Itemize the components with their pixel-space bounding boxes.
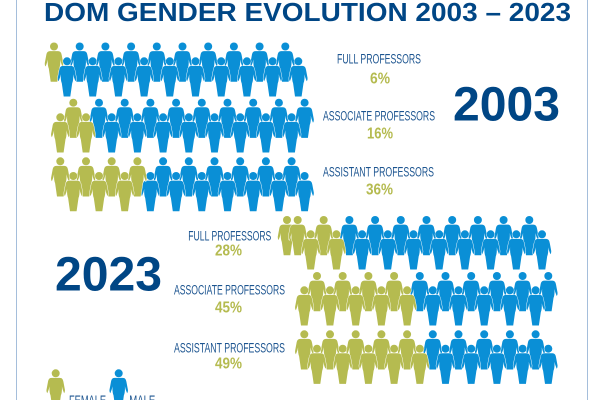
male figures [141,157,314,211]
label: 2023 assistant professors [174,340,285,373]
female figures [295,272,416,326]
pictogram: 2003 associate professors [51,99,314,152]
label: 2003 full professors: 6% [370,71,390,88]
male figures [58,42,308,96]
label: 2023 associate professors [174,282,285,317]
label: 2023 full professors: FULL PROFESSORS [188,229,271,244]
label: 2003 full professors: FULL PROFESSORS [337,52,421,67]
pictogram: 2023 full professors [278,216,551,270]
label: 2023 full professors [188,229,271,260]
year: 2003: 2003 [453,78,560,132]
male figures [340,216,551,270]
male figures [411,272,558,326]
male figures [90,99,314,152]
label: 2003 assistant professors: 36% [366,182,393,199]
label: 2023 associate professors: 45% [215,300,242,317]
legend [46,369,155,400]
label: 2003 assistant professors [323,165,434,199]
label: 2003 associate professors: 16% [367,126,393,143]
label: 2023 assistant professors: 49% [215,356,242,373]
label: 2003 full professors [337,52,421,88]
label: 2023 full professors: 28% [215,243,242,260]
label: 2023 associate professors: ASSOCIATE PROFESSORS [174,282,285,297]
female figures [51,157,147,211]
pictogram: 2023 assistant professors [295,330,558,384]
pictogram: 2003 assistant professors [51,157,314,211]
female figures [45,42,63,82]
label: 2023 assistant professors: ASSISTANT PROFESSORS [174,340,285,355]
icon: male figure [109,369,128,400]
female figures [278,216,346,270]
year: 2023: 2023 [55,248,162,302]
label: 2003 associate professors [323,109,435,143]
pictogram: 2003 full professors [45,42,308,96]
icon: female figure [46,369,65,400]
pictogram: 2023 associate professors [295,272,558,326]
male figures [424,330,558,384]
label: 2003 associate professors: ASSOCIATE PROFESSORS [323,109,435,124]
female figures [295,330,429,384]
female figures [51,99,95,152]
label: 2003 assistant professors: ASSISTANT PROFESSORS [323,165,434,180]
